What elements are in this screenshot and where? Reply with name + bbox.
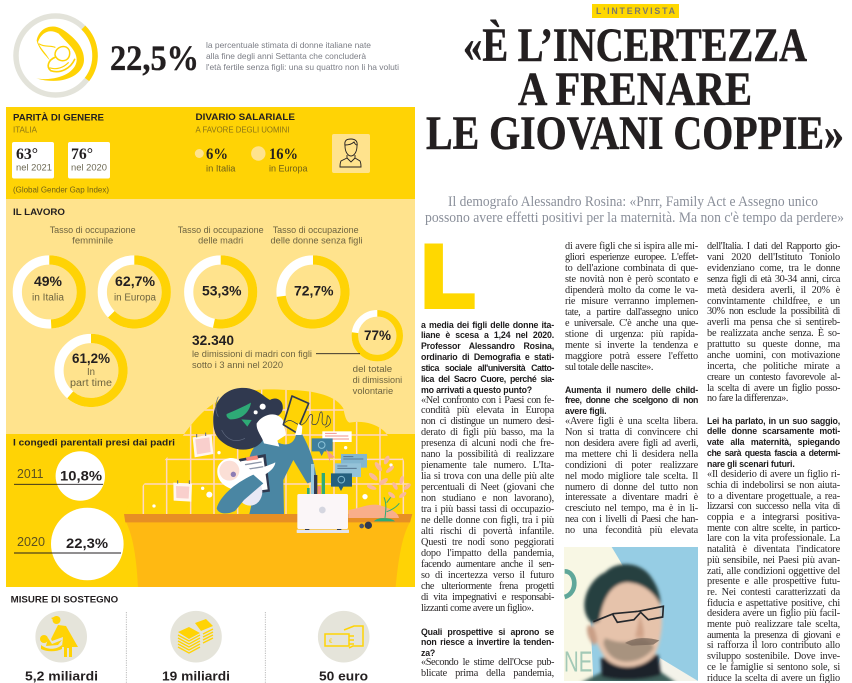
icon: hand with banknote: €: [329, 639, 333, 645]
photo: Alessandro Rosina: NE: [564, 646, 592, 678]
description: la percentuale stimata di donne italiane nate: [206, 40, 371, 50]
il lavoro heading: IL LAVORO: [13, 207, 66, 218]
article column 3 top: creare un contesto favorevole al-: [707, 372, 840, 383]
article column 3 top: anche uomini, con motivazione: [707, 350, 840, 361]
article column 3 top: evidenziano come, tra le donne: [707, 263, 840, 274]
article column 2 top: sul totale delle nascite».: [565, 362, 653, 373]
article column 1 intro: [421, 320, 554, 395]
article column 1 answer: non ci distingue un numero desi-: [421, 416, 554, 427]
article column 2 answer: no una fecondità più elevata: [565, 525, 698, 536]
article column 1 answer: condità più elevata in Europa: [421, 405, 554, 416]
photo: Alessandro Rosina: [564, 547, 698, 683]
article column 3 answer: mente può realizzare tale scelta,: [707, 619, 840, 630]
article column 1 intro: liane è scesa a 1,24 nel 2020.: [421, 330, 554, 340]
article column 3 top: convintamente childfree, e un: [707, 296, 840, 307]
article column 1 answer: ne delle donne con figli, tra i più: [421, 515, 554, 526]
article column 3 answer: lare con la vita professionale. La: [707, 533, 840, 544]
article column 3 answer: [707, 469, 840, 683]
article column 3 question: vate alla maternità, spiegando: [707, 437, 840, 447]
floating chat and documents: [312, 431, 367, 491]
bars: [307, 464, 325, 495]
title: A FRENARE: [518, 64, 752, 116]
article column 3 top: averli ma pensa che si sentireb-: [707, 317, 840, 328]
article column 3 top: incerta, che politiche mirate a: [707, 361, 840, 372]
congedi heading: I congedi parentali presi dai padri: [13, 438, 175, 448]
panel: divario salariale: in Italia: [206, 162, 236, 174]
icon: mother and child ring: [16, 16, 95, 95]
measure: 19 miliardi: [162, 611, 230, 683]
donut: 53,3%: 53,3%: [202, 282, 242, 298]
panel: yellow background: [6, 107, 415, 587]
del totale label: volontarie: [353, 386, 393, 396]
article column 3 answer: schia di indebolirsi se non aiuta-: [707, 480, 840, 491]
panel: divario salariale: in Europa: [269, 162, 308, 174]
donut labels: Tasso di occupazione: [50, 225, 136, 235]
article column 2 top: di avere figli che si ispira alle mi-: [565, 241, 698, 252]
article column 3 answer: zati, alle condizioni oggettive del: [707, 566, 840, 577]
title: [426, 19, 844, 160]
panel: divario salariale: [195, 112, 370, 174]
article column 3 answer: presente e alle prospettive futu-: [707, 576, 840, 587]
article column 3 answer: re. Nei contesti caratterizzati da: [707, 587, 840, 598]
article column 1 answer: «Nel confronto con i Paesi con fe-: [421, 394, 554, 406]
misure di sostegno heading: MISURE DI SOSTEGNO: [11, 594, 119, 606]
card: 2020: 76°: [71, 146, 93, 163]
article column 3 answer: si rafforza il loro contributo allo: [707, 640, 840, 651]
donut: 62,7% in Europa: 62,7%: [115, 273, 156, 289]
donut: 49% in Italia: [17, 260, 81, 324]
article column 3 question: Lei ha parlato, in un suo saggio,: [707, 416, 840, 426]
baby: [217, 458, 275, 513]
article column 1 question: non riesce a invertire la tenden-: [421, 637, 554, 647]
article column 1 answer: pienamente tale numero. L'Ita-: [421, 460, 554, 471]
laptop: [297, 494, 349, 533]
icon: man: [332, 134, 370, 173]
article column 1 intro: ordinario di Demografia e stati-: [421, 352, 554, 362]
article column 1 answer: so di incertezza verso il futuro: [421, 570, 554, 581]
plant and mound: [348, 455, 412, 529]
woman: [213, 388, 317, 514]
measure: 5,2 miliardi: [25, 611, 98, 683]
donut: 77%: [355, 313, 400, 358]
panel: parità di genere: [12, 112, 110, 194]
panel: divario salariale: 16%: [269, 146, 298, 163]
donut: 61,2% part time: In: [87, 367, 95, 378]
article column 3 answer: mente con altre scelte, in partico-: [707, 523, 840, 534]
card: 2020: nel 2020: [71, 162, 107, 172]
article column 2 top: rie misure verranno implemen-: [565, 296, 698, 307]
article column 1 answer: Questi tre nodi sono peggiorati: [421, 537, 554, 548]
article column 3 answer: sviluppo sostenibile. Dove inve-: [707, 651, 840, 662]
article column 1 answer: derato di figli più basso, ma la: [421, 427, 554, 438]
donut labels: delle madri: [198, 236, 243, 246]
card: 2021: [12, 142, 54, 178]
clipboard: [239, 454, 270, 493]
panel: parità di genere: PARITÀ DI GENERE: [13, 112, 105, 124]
congedi 2020: 2020: [17, 534, 45, 549]
article column 3 top: prattutto su queste donne, ma: [707, 339, 840, 350]
article column 2 answer: numero di donne del tutto non: [565, 482, 698, 493]
article column 3 top: no fare la differenza».: [707, 393, 788, 404]
donut: 49% in Italia: in Italia: [32, 292, 64, 304]
article column 2 answer: cresciuto nel tempo, ma è in li-: [565, 503, 698, 514]
article column 3 question: nare gli scenari futuri.: [707, 459, 795, 469]
article column 1 answer: [421, 394, 554, 614]
article column 1 answer: lia si trova con una delle più alte: [421, 471, 554, 482]
card: 2021: nel 2021: [16, 162, 52, 172]
article column 1 answer: di vita impegnativi e responsabi-: [421, 592, 554, 603]
big percentage: 22,5%: [110, 38, 199, 78]
notes: [173, 433, 213, 502]
donut: 49% in Italia: 49%: [34, 273, 63, 289]
article column 2 top: dipenderà molto da come le va-: [565, 285, 698, 296]
donut: 61,2% part time: [59, 338, 123, 402]
article column 3 top: be realizzata anche senza. È so-: [707, 328, 840, 339]
article column 3 answer: fiducia e aspettative positive, chi: [707, 598, 840, 609]
desk: [124, 514, 412, 587]
header statistic: [16, 16, 399, 95]
donut: 61,2% part time: part time: [70, 378, 112, 389]
article column 3 answer: lizzarsi con successo nella vita di: [707, 501, 840, 512]
del totale label: di dimissioni: [353, 375, 402, 385]
article column 2 answer: non desidera avere figli ad averli,: [565, 438, 698, 449]
icon: stacks of banknotes: [170, 611, 222, 662]
donut labels: delle donne senza figli: [270, 236, 362, 246]
article column 1 question: [421, 626, 554, 658]
panel: parità di genere: (Global Gender Gap Index): [13, 184, 109, 194]
article column 2 answer: interessate a diventare madri è: [565, 492, 698, 503]
icon: mother changing baby: [35, 611, 87, 662]
article column 3 question: che sarà questa fascia a determi-: [707, 448, 840, 458]
article column 3 top: la scelta di avere un figlio posso-: [707, 383, 840, 394]
panel: parità di genere: ITALIA: [13, 124, 37, 134]
article column 1 intro: mo arrivati a questo punto?: [421, 385, 532, 395]
article column 1 answer: lizzanti come avere un figlio».: [421, 603, 534, 614]
article column 2 top: to dell'azione combinata di que-: [565, 263, 698, 274]
description: [206, 40, 399, 72]
article column 1 answer: tra i più bassi tassi di occupazio-: [421, 504, 554, 515]
article column 1 answer: non studiano e non lavorano),: [421, 493, 554, 504]
article column 3 top: vani 2020 dell'Istituto Toniolo: [707, 252, 840, 263]
article column 2 question: avere figli.: [565, 406, 606, 416]
article column 1 closing answer: blicate prima della pandemia,: [421, 668, 554, 679]
article column 2 answer: [565, 416, 698, 536]
description: alla fine degli anni Settanta che concluderà: [206, 51, 366, 61]
del totale label: del totale: [353, 364, 392, 374]
article column 3 top: metà desidera averli, il 20% è: [707, 285, 840, 296]
card: 2021: 63°: [16, 146, 38, 163]
subtitle: [425, 194, 844, 226]
article column 1 question: za?: [421, 648, 435, 658]
article column 1 answer: percentuali di Neet (giovani che: [421, 482, 554, 493]
illustration: woman working with baby at desk: [120, 380, 420, 587]
article column 1 closing answer: [421, 657, 554, 679]
donut: 72,7%: [281, 260, 345, 324]
card: 2020: [68, 142, 110, 178]
article column 2 top: e universale. C'è anche una que-: [565, 318, 698, 329]
donut labels: Tasso di occupazione: [178, 225, 264, 235]
article column 3 top: [707, 241, 840, 404]
article column 2 answer: nea con i livelli di Paesi che han-: [565, 514, 698, 525]
donut labels: femminile: [72, 236, 113, 246]
article column 1 answer: presenza di alcuni nodi che fre-: [421, 438, 554, 449]
article column 2 top: [565, 241, 698, 373]
donut: 61,2% part time: 61,2%: [72, 350, 111, 366]
donut labels: [50, 225, 362, 246]
donut: 62,7% in Europa: [102, 260, 166, 324]
article column 2 top: gliori esperienze europee. L'effet-: [565, 252, 698, 263]
drop cap: L: [422, 229, 474, 325]
article column 3 answer: aumenta la presenza di giovani e: [707, 630, 840, 641]
article column 1 answer: alti rischi di povertà infantile.: [421, 526, 554, 537]
article column 2 top: mente si inverte la tendenza e: [565, 340, 698, 351]
article column 3 question: [707, 416, 840, 469]
article column 1 intro: a media dei figli delle donne ita-: [421, 320, 554, 330]
article column 2 top: ste novità non è però scontato e: [565, 274, 698, 285]
article column 1 answer: dopo l'impatto della pandemia,: [421, 548, 554, 559]
article column 2 answer: condizioni di poter realizzare: [565, 460, 698, 471]
article column 1 intro: lica del Sacro Cuore, perché sia-: [421, 374, 554, 384]
article column 2 answer: Non si tratta di convincere chi: [565, 427, 698, 438]
tag: l'intervista: [592, 4, 679, 18]
article column 2 top: stione di urgenza: più rapida-: [565, 329, 698, 340]
article column 1 intro: stica sociale all'università Catto-: [421, 363, 554, 373]
article column 1 answer: che ulteriormente frena progetti: [421, 581, 554, 592]
dimissioni callout: le dimissioni di madri con figli: [192, 349, 312, 359]
donut: 62,7% in Europa: in Europa: [114, 292, 156, 304]
congedi 2011: [14, 451, 105, 501]
phone: [283, 396, 331, 435]
congedi 2020: [14, 508, 124, 580]
donut: 53,3%: [189, 260, 253, 324]
article column 2 answer: nel modo migliore tale scelta. Il: [565, 471, 698, 482]
article column 3 answer: desidera avere un figlio più facil-: [707, 608, 840, 619]
article column 3 answer: to a diventare progettuale, a rea-: [707, 491, 840, 502]
article column 1 answer: nano la possibilità di realizzare: [421, 449, 554, 460]
panel: divario salariale: A FAVORE DEGLI UOMINI: [196, 124, 290, 134]
article column 1 intro: Professor Alessandro Rosina,: [421, 341, 554, 351]
article column 2 answer: «Avere figli è una scelta libera.: [565, 416, 698, 427]
article column 3 answer: coppia e a integrarsi positiva-: [707, 512, 840, 523]
article column 2 question: Aumenta il numero delle child-: [565, 385, 698, 395]
measure: 50 euro: [318, 611, 370, 683]
dimissioni callout: 32.340: [192, 332, 234, 348]
donut: 72,7%: 72,7%: [294, 282, 334, 298]
article column 3 top: dell'Italia. I dati del Rapporto gio-: [707, 241, 840, 252]
donut labels: Tasso di occupazione: [273, 225, 359, 235]
subtitle: Il demografo Alessandro Rosina: «Pnrr, Family Act e Assegno unico: [448, 194, 818, 210]
article column 2 answer: ma mettere chi li desidera nella: [565, 449, 698, 460]
tag: l'intervista: L'INTERVISTA: [596, 6, 676, 16]
congedi 2011: 10,8%: [60, 468, 102, 484]
dimissioni callout: sotto i 3 anni nel 2020: [192, 360, 283, 370]
article column 2 question: [565, 385, 698, 416]
article column 3 question: delle donne scarsamente moti-: [707, 426, 840, 436]
article column 2 top: tate, a partire dall'assegno unico: [565, 307, 698, 318]
article column 3 answer: natalità è diventata l'indicatore: [707, 544, 840, 555]
donut: 77%: 77%: [364, 328, 391, 343]
panel: divario salariale: DIVARIO SALARIALE: [196, 112, 296, 123]
dimissioni callout: [192, 332, 360, 370]
article column 3 answer: «Il desiderio di avere un figlio ri-: [707, 469, 840, 480]
article column 2 question: free, donne che scelgono di non: [565, 395, 698, 405]
congedi 2011: 2011: [17, 466, 44, 481]
article column 1 answer: facendo aumentare anche il sen-: [421, 559, 554, 570]
article column 3 top: senza figli di età 30-34 anni, circa: [707, 274, 840, 285]
panel: il lavoro background: [6, 199, 415, 434]
congedi 2020: 22,3%: [66, 536, 108, 551]
article column 3 answer: più sensibile, nei Paesi più avan-: [707, 555, 840, 566]
del totale label: [353, 364, 402, 396]
article column 3 top: 30% non esclude la possibilità di: [707, 306, 840, 317]
article column 3 answer: ce le famiglie si sentono sole, si: [707, 662, 840, 673]
article column 2 top: maggiore potrà essere l'effetto: [565, 351, 698, 362]
description: l'età fertile senza figli: una su quattro non li ha voluti: [206, 62, 399, 72]
panel: divario salariale: 6%: [206, 146, 228, 163]
article column 1 closing answer: «Secondo le stime dell'Ocse pub-: [421, 657, 554, 668]
article column 1 question: Quali prospettive si aprono se: [421, 626, 554, 636]
